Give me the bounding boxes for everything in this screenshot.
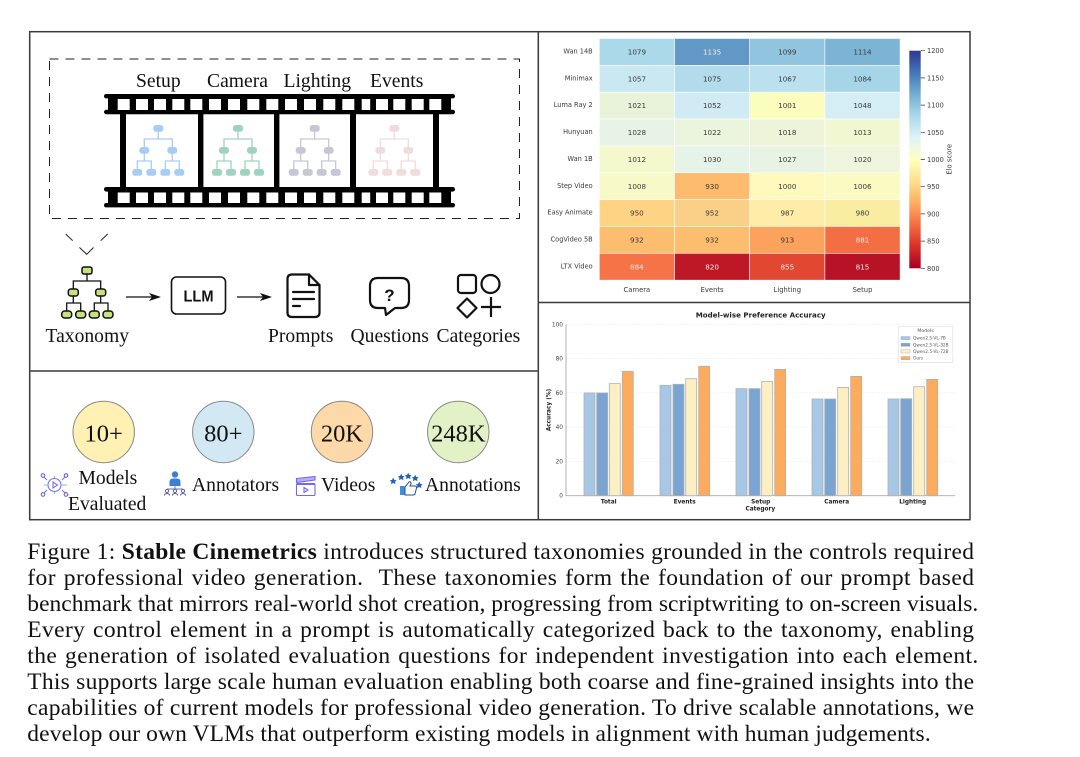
film strip	[104, 94, 455, 207]
heatmap values: 930	[705, 182, 719, 191]
heatmap values: 1018	[778, 128, 797, 137]
heatmap cells	[599, 38, 900, 280]
label: prompts: Prompts	[268, 326, 333, 347]
y axis tick labels: 100	[552, 322, 563, 328]
chart legend: Qwen2.5-VL-7B	[913, 336, 946, 342]
heatmap column labels: Camera	[624, 286, 650, 294]
heatmap row labels: LTX Video	[561, 262, 593, 270]
icon: categories shapes	[458, 275, 501, 318]
heatmap row labels: Luma Ray 2	[554, 101, 593, 109]
heatmap values: 1028	[628, 128, 646, 137]
arrow: dashed chevron down	[66, 234, 108, 254]
chart title: Model-wise Preference Accuracy	[696, 310, 826, 320]
colorbar legend: Elo score	[946, 144, 954, 175]
heatmap values: 815	[856, 262, 869, 271]
x axis category labels: Setup	[751, 500, 770, 506]
label: taxonomy: Taxonomy	[46, 326, 129, 347]
heatmap row labels: CogVideo 5B	[551, 236, 593, 244]
figure caption: capabilities of current models for professional video generation. To drive scalable annotations, we	[27, 695, 974, 721]
icon: models network	[41, 474, 68, 496]
colorbar legend: 1000	[927, 156, 944, 164]
x axis category labels	[601, 500, 926, 512]
icon: annotations thumbs up	[390, 473, 423, 495]
stat: models: 10+	[85, 420, 123, 448]
colorbar legend	[909, 47, 954, 273]
colorbar legend: 800	[927, 265, 940, 273]
icon: lighting tree	[289, 125, 341, 176]
icon: LLM box: LLM	[184, 288, 214, 306]
heatmap row labels	[547, 48, 593, 270]
chart: model-wise preference accuracy bars	[546, 310, 955, 512]
heatmap values: 1075	[703, 74, 721, 83]
label: models evaluated: Evaluated	[68, 494, 147, 515]
gridlines and axes	[566, 324, 955, 496]
heatmap values: 1008	[628, 182, 646, 191]
heatmap row labels: Easy Animate	[547, 209, 593, 217]
heatmap values: 913	[780, 236, 794, 244]
x axis category labels: Camera	[824, 500, 849, 506]
icon: taxonomy tree	[62, 267, 113, 318]
heatmap values: 1006	[853, 182, 872, 191]
y axis tick labels: 80	[556, 357, 563, 363]
heatmap values: 1021	[628, 101, 646, 110]
heatmap values	[628, 48, 872, 271]
heatmap values: 952	[705, 209, 719, 218]
heatmap row labels: Wan 14B	[563, 48, 593, 56]
chart: Elo score heatmap	[547, 38, 954, 294]
heatmap values: 1052	[703, 101, 721, 110]
x axis category labels: Total	[601, 500, 617, 506]
icon: video clapperboard	[296, 476, 315, 496]
label: annotations: Annotations	[425, 475, 521, 496]
heading: taxonomy categories: Setup	[136, 71, 181, 92]
heatmap row labels: Hunyuan	[563, 128, 593, 136]
arrow: taxonomy to LLM	[126, 293, 161, 301]
heatmap values: 950	[630, 209, 644, 218]
heatmap values: 1030	[703, 155, 722, 164]
y axis title: Accuracy (%)	[546, 388, 552, 431]
heatmap row labels: Step Video	[557, 182, 593, 190]
x axis category labels: Category	[745, 506, 775, 512]
label: categories: Categories	[436, 326, 520, 347]
heatmap values: 932	[705, 236, 719, 244]
heatmap values: 1135	[703, 48, 721, 56]
x axis category labels: Events	[674, 500, 696, 506]
colorbar legend: 1150	[927, 74, 944, 82]
stat: videos	[311, 401, 373, 463]
heatmap column labels	[624, 286, 872, 294]
icon: events tree	[368, 125, 420, 176]
figure caption: for professional video generation. These taxonomies form the foundation of our prompt based	[27, 565, 974, 591]
heatmap values: 881	[856, 236, 869, 244]
heatmap column labels: Setup	[853, 286, 872, 294]
heatmap values: 820	[705, 262, 719, 271]
chart legend: Ours	[913, 356, 924, 362]
panel: taxonomy pipeline	[46, 59, 520, 347]
stat: videos: 20K	[321, 420, 363, 448]
stat: models	[73, 401, 134, 463]
heatmap values: 980	[856, 209, 870, 218]
panel: dataset statistics	[41, 401, 521, 515]
icon: questions bubble: ?	[384, 286, 395, 305]
label: models evaluated	[68, 468, 147, 515]
arrow: LLM to prompts	[237, 293, 272, 301]
figure caption: the generation of isolated evaluation questions for independent investigation into each element.	[27, 643, 978, 669]
figure caption: Every control element in a prompt is automatically categorized back to the taxonomy, enabling	[27, 617, 974, 643]
heading: taxonomy categories	[136, 71, 423, 92]
figure caption	[27, 539, 978, 747]
heatmap values: 1012	[628, 155, 646, 164]
heatmap values: 932	[630, 236, 644, 244]
icon: LLM box	[172, 277, 226, 314]
x axis category labels: Lighting	[899, 500, 926, 506]
heatmap values: 884	[630, 262, 644, 271]
icon: setup tree	[132, 125, 184, 176]
heatmap column labels: Lighting	[774, 286, 801, 294]
chart legend: Qwen2.5-VL-72B	[913, 349, 949, 355]
label: annotators: Annotators	[192, 475, 279, 496]
y axis tick labels: 60	[556, 391, 563, 397]
stat: annotators	[193, 401, 254, 463]
heatmap values: 1057	[628, 74, 646, 83]
heading: taxonomy categories: Lighting	[284, 71, 351, 92]
figure caption: benchmark that mirrors real-world shot creation, progressing from scriptwriting to on-screen visuals.	[27, 591, 978, 617]
figure caption: Figure 1: Stable Cinemetrics introduces structured taxonomies grounded in the controls required	[27, 539, 974, 565]
y axis tick labels: 20	[556, 459, 563, 465]
icon: questions bubble	[370, 278, 409, 315]
heatmap row labels: Wan 1B	[568, 155, 593, 163]
label: models evaluated: Models	[78, 468, 137, 489]
heatmap values: 1067	[778, 74, 796, 83]
y axis tick labels	[552, 322, 563, 500]
heatmap values: 1084	[853, 74, 872, 83]
icon: prompts document	[288, 274, 320, 317]
colorbar legend: 1050	[927, 129, 944, 137]
heatmap values: 1048	[853, 101, 872, 110]
colorbar legend: 1100	[927, 102, 944, 110]
heatmap values: 1001	[778, 101, 796, 110]
heatmap column labels: Events	[701, 286, 724, 294]
dashed taxonomy container	[50, 59, 520, 218]
figure caption: This supports large scale human evaluation enabling both coarse and fine-grained insights into the	[27, 669, 974, 695]
icon: camera tree	[212, 125, 264, 176]
panel: figure frame	[30, 32, 970, 520]
chart legend: Models	[917, 328, 934, 334]
heading: taxonomy categories: Camera	[207, 71, 268, 92]
label: videos: Videos	[321, 475, 375, 496]
heatmap values: 1022	[703, 128, 721, 137]
heatmap values: 1000	[778, 182, 797, 191]
figure caption: develop our own VLMs that outperform existing models in alignment with human judgements.	[27, 721, 931, 747]
stat: annotations: 248K	[431, 420, 486, 448]
chart legend	[898, 327, 953, 363]
bars	[584, 366, 938, 496]
heatmap values: 987	[780, 209, 794, 218]
heatmap values: 1099	[778, 48, 797, 56]
heatmap values: 1020	[853, 155, 872, 164]
label: questions: Questions	[350, 326, 429, 347]
stat: annotators: 80+	[204, 420, 242, 448]
chart legend: Qwen2.5-VL-32B	[913, 342, 949, 348]
y axis tick labels: 40	[556, 425, 563, 431]
heatmap values: 1013	[853, 128, 872, 137]
colorbar legend: 1200	[927, 47, 944, 55]
heading: taxonomy categories: Events	[370, 71, 423, 92]
stat: annotations	[428, 401, 489, 463]
colorbar legend: 850	[927, 238, 940, 246]
icon: annotators	[164, 471, 186, 496]
colorbar legend: 900	[927, 210, 940, 218]
heatmap values: 1079	[628, 48, 646, 56]
colorbar legend: 950	[927, 183, 940, 191]
heatmap values: 855	[780, 262, 794, 271]
y axis tick labels: 0	[559, 494, 563, 500]
heatmap row labels: Minimax	[565, 74, 593, 82]
heatmap values: 1027	[778, 155, 796, 164]
heatmap values: 1114	[853, 48, 872, 56]
